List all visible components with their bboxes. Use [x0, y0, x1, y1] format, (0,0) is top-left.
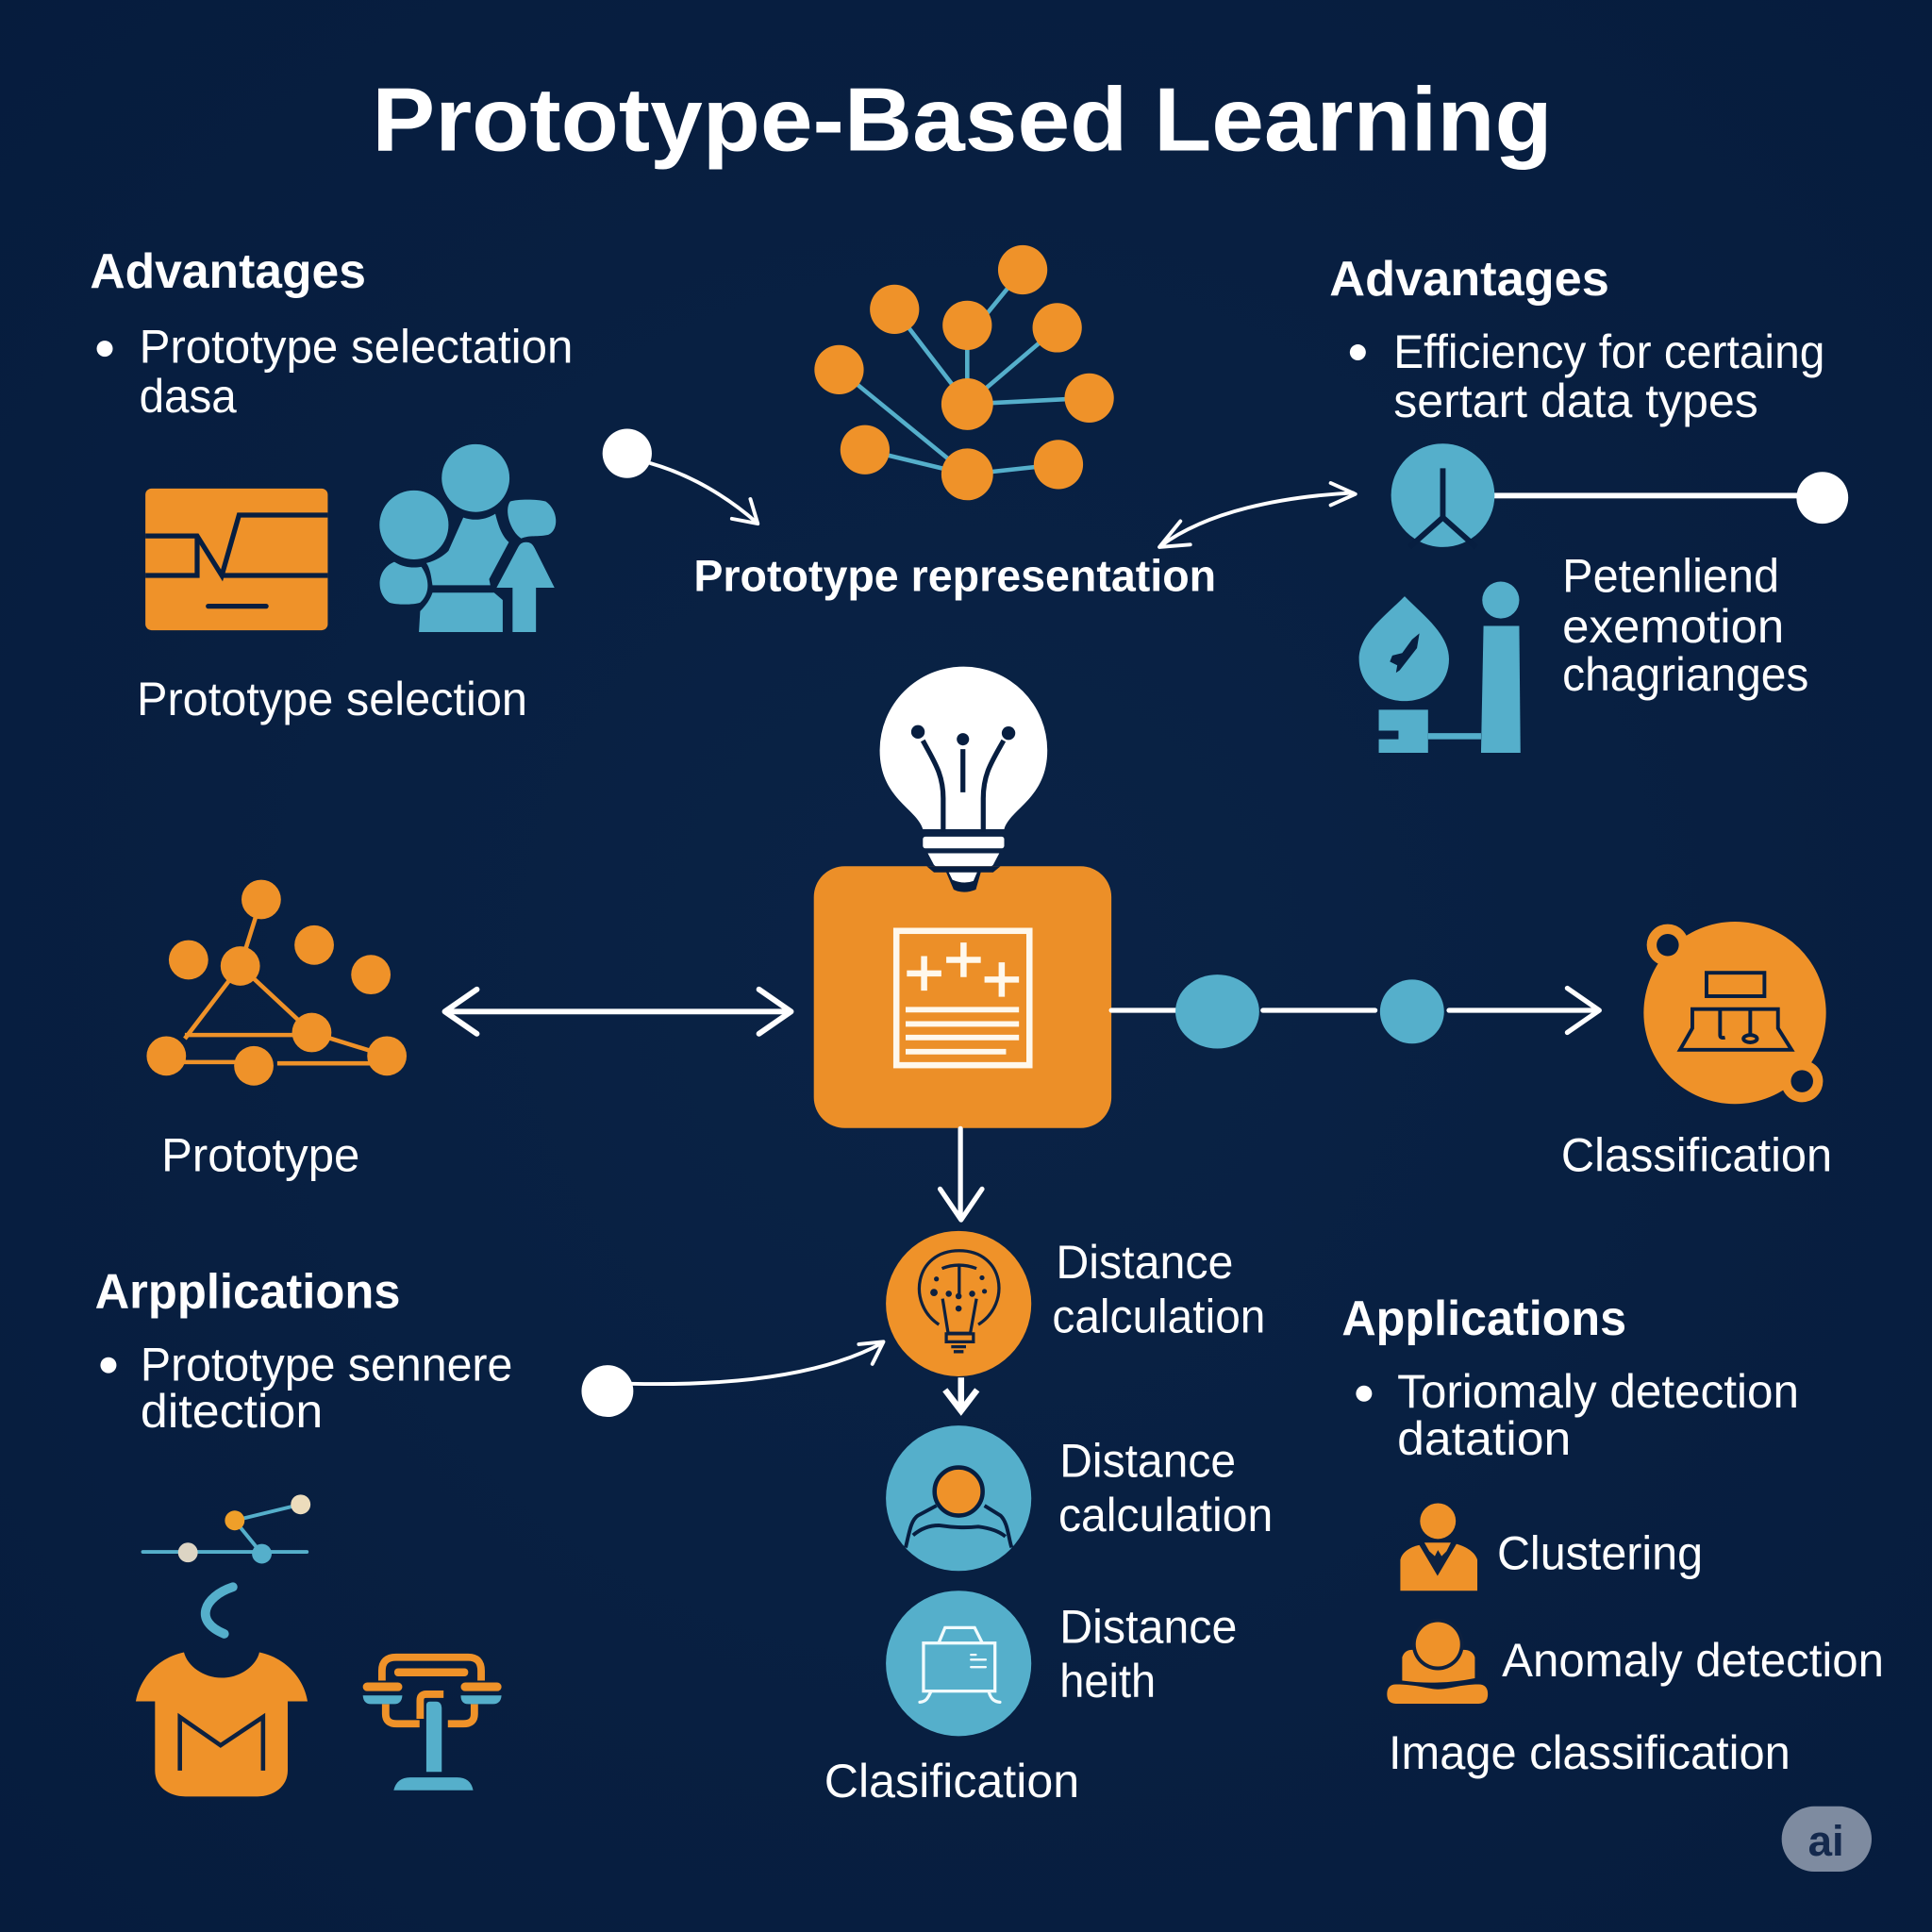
- panel: applications left: [95, 1264, 512, 1796]
- text: petenliend exemotion chagrianges: exemotion: [1562, 600, 1784, 653]
- bullet list: applications left: Prototype sennere: [141, 1339, 512, 1391]
- icon: teal monitor circle: [886, 1591, 1031, 1736]
- label: classification: Classification: [1561, 1128, 1832, 1181]
- icon: teal drop and column: [1359, 581, 1521, 753]
- icon: teal clock with line and white dot: [1391, 443, 1848, 547]
- label: prototype representation: Prototype representation: [693, 550, 1216, 600]
- bullet list: applications right: datation: [1397, 1412, 1571, 1465]
- bullet list: advantages right: Efficiency for certaing: [1393, 325, 1824, 378]
- icon: scale: [363, 1657, 502, 1790]
- icon: orange prototype network: [146, 880, 407, 1086]
- arrow: double arrow prototype to box: [445, 990, 791, 1034]
- icon: orange shirt: [136, 1653, 308, 1796]
- bullet list: applications right: [1356, 1365, 1799, 1465]
- panel: advantages right: [1329, 252, 1848, 753]
- bullet list: applications left: [100, 1339, 512, 1438]
- icon: orange bulb circle: [886, 1231, 1031, 1376]
- text: distance heith: heith: [1059, 1655, 1156, 1707]
- panel: applications right: [1341, 1291, 1884, 1779]
- arrow: short down: [945, 1377, 977, 1411]
- icon: classification badge: [1643, 922, 1826, 1104]
- connector: box to classification: [1111, 974, 1599, 1049]
- icon: teal person circle: [886, 1425, 1031, 1571]
- text: petenliend exemotion chagrianges: chagrianges: [1562, 648, 1808, 701]
- text: petenliend exemotion chagrianges: [1562, 550, 1808, 701]
- label: anomaly detection: Anomaly detection: [1502, 1634, 1884, 1687]
- icon: orange network: [814, 245, 1114, 500]
- heading: advantages left: Advantages: [90, 244, 366, 299]
- icon: orange chart card: [145, 489, 327, 630]
- text: distance calculation 2: Distance: [1059, 1434, 1236, 1487]
- badge: ai: ai: [1808, 1817, 1844, 1865]
- icon: teal line network: [143, 1494, 310, 1563]
- title: Prototype-Based Learning: [372, 70, 1553, 170]
- text: distance heith: [1059, 1601, 1237, 1707]
- arrow: box down to distance: [941, 1128, 982, 1220]
- text: distance calculation 1: Distance: [1056, 1236, 1233, 1289]
- bullet list: applications right: Toriomaly detection: [1397, 1365, 1799, 1418]
- icon: document with plus signs: [896, 931, 1029, 1065]
- panel: advantages left: [90, 244, 573, 725]
- label: prototype selection: Prototype selection: [137, 673, 527, 725]
- icon: light bulb: [880, 667, 1047, 868]
- text: distance heith: Distance: [1059, 1601, 1237, 1654]
- heading: applications right: Applications: [1341, 1291, 1626, 1346]
- icon: person with tie: [1400, 1503, 1477, 1591]
- bullet list: advantages right: [1350, 325, 1824, 427]
- label: clasification: Clasification: [824, 1755, 1079, 1807]
- connector: dot to prototype representation: [603, 429, 758, 524]
- heading: applications left: Arpplications: [95, 1264, 400, 1319]
- bullet list: advantages left: [97, 321, 573, 423]
- text: distance calculation 2: calculation: [1058, 1489, 1273, 1541]
- heading: advantages right: Advantages: [1329, 252, 1609, 307]
- icon: teal people with arrow: [379, 444, 556, 632]
- badge: ai: [1782, 1807, 1872, 1872]
- bullet list: advantages left: Prototype selectation: [140, 321, 573, 374]
- label: prototype: Prototype: [161, 1128, 359, 1181]
- bullet list: advantages right: sertart data types: [1393, 375, 1758, 427]
- label: image classification: Image classification: [1389, 1726, 1790, 1779]
- bullet list: advantages left: dasa: [140, 370, 237, 423]
- connector: dot to orange bulb: [581, 1341, 883, 1417]
- text: distance calculation 1: calculation: [1052, 1291, 1265, 1343]
- panel: central orange box: [814, 866, 1111, 1128]
- bullet list: applications left: ditection: [141, 1385, 323, 1438]
- text: distance calculation 2: [1058, 1434, 1273, 1541]
- label: clustering: Clustering: [1497, 1526, 1703, 1579]
- arrow: curved double arrow: [1159, 483, 1356, 547]
- text: petenliend exemotion chagrianges: Petenliend: [1562, 550, 1779, 603]
- icon: person at desk: [1387, 1619, 1488, 1704]
- text: distance calculation 1: [1052, 1236, 1265, 1343]
- icon: teal hook: [206, 1587, 233, 1634]
